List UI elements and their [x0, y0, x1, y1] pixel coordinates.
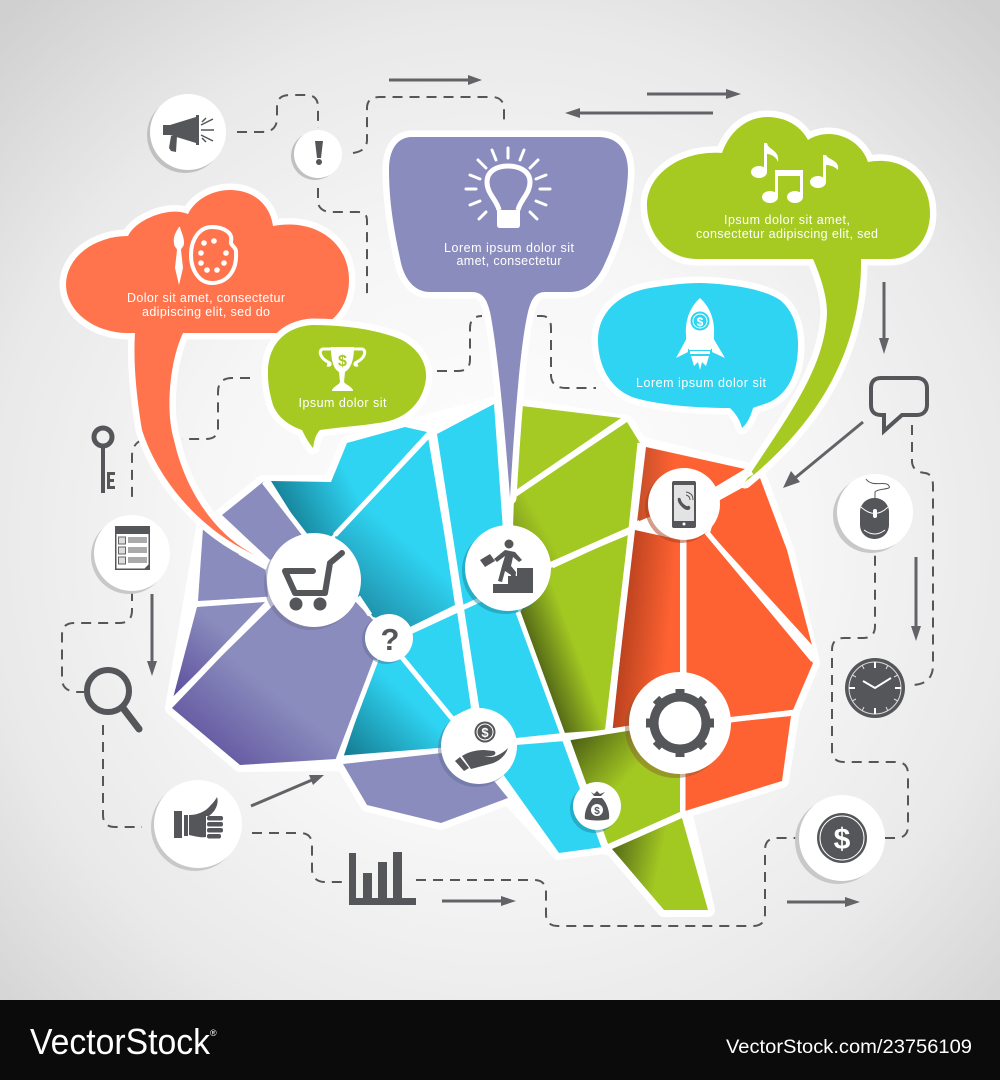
icon: rocket [676, 298, 725, 370]
icon: dollar coin [795, 795, 885, 884]
text: red cloud [127, 291, 285, 319]
text: red cloud: Dolor sit amet, consectetur [127, 291, 285, 305]
white brain outline [172, 404, 813, 910]
footer url: VectorStock.com/23756109 [726, 1037, 972, 1058]
text: blue bubble: Lorem ipsum dolor sit [636, 376, 767, 390]
icon: trophy [320, 347, 365, 391]
node: gear [625, 672, 731, 778]
brain region: orange [612, 447, 813, 811]
icon: question mark: ? [381, 622, 399, 657]
straight arrows [147, 75, 921, 907]
icon: exclamation mark [291, 130, 342, 180]
connector dashed lines [62, 95, 933, 926]
node: climbing stairs [462, 525, 551, 614]
node: money bag [570, 782, 621, 833]
brain map [170, 404, 813, 910]
icon: bar chart [349, 852, 416, 905]
icon: checklist [91, 515, 170, 594]
icon: hand and coin: $ [481, 725, 489, 740]
icon: thumbs up [151, 780, 242, 871]
icon: gear [646, 689, 714, 757]
icon: magnifier [87, 670, 139, 729]
link from red tail to cart [240, 552, 272, 570]
white link strokes between nodes [170, 420, 813, 850]
text: purple bubble: Lorem ipsum dolor sit [444, 241, 575, 255]
node: question mark [362, 614, 413, 664]
icon: computer mouse [833, 474, 913, 553]
text: red cloud: adipiscing elit, sed do [142, 305, 270, 319]
icon: rocket: $ [697, 315, 704, 329]
node: smartphone [645, 468, 720, 543]
text: green cloud [696, 213, 878, 241]
text: small green bubble: Ipsum dolor sit [298, 396, 387, 410]
icon: music notes [751, 143, 838, 203]
icon: clock [845, 658, 905, 718]
speech bubble: green cloud with music notes [647, 117, 930, 491]
brain region: purple [172, 482, 508, 823]
brain region: cyan [271, 404, 603, 853]
icon: money bag: $ [594, 806, 600, 817]
footer logo: VectorStock [30, 1021, 211, 1062]
text: green cloud: Ipsum dolor sit amet, [724, 213, 850, 227]
node: shopping cart [264, 533, 361, 630]
icon: man climbing stairs [480, 540, 533, 593]
text: green cloud: consectetur adipiscing elit, sed [696, 227, 878, 241]
text: purple bubble [444, 241, 575, 268]
icon: palette and brush [174, 227, 236, 285]
speech bubble: purple with bulb [389, 137, 628, 498]
speech bubble: red cloud with palette [66, 190, 349, 570]
icon: light bulb [466, 148, 550, 228]
speech bubble: blue with rocket [598, 283, 798, 428]
text: purple bubble: amet, consectetur [456, 254, 562, 268]
icon: chat bubble [871, 378, 927, 431]
icon: dollar coin: $ [834, 823, 851, 856]
icon: cart [285, 553, 342, 610]
speech bubble: small green with trophy [268, 325, 426, 448]
node: hand with coin [438, 708, 517, 787]
icon: key [94, 428, 115, 493]
brain region: green [513, 406, 708, 910]
link from green tail to phone [715, 472, 752, 491]
icon: trophy: $ [338, 353, 347, 370]
footer band [0, 1000, 1000, 1080]
footer registered mark: ® [210, 1028, 217, 1038]
icon: megaphone [147, 94, 226, 173]
icon: smartphone [672, 481, 696, 528]
